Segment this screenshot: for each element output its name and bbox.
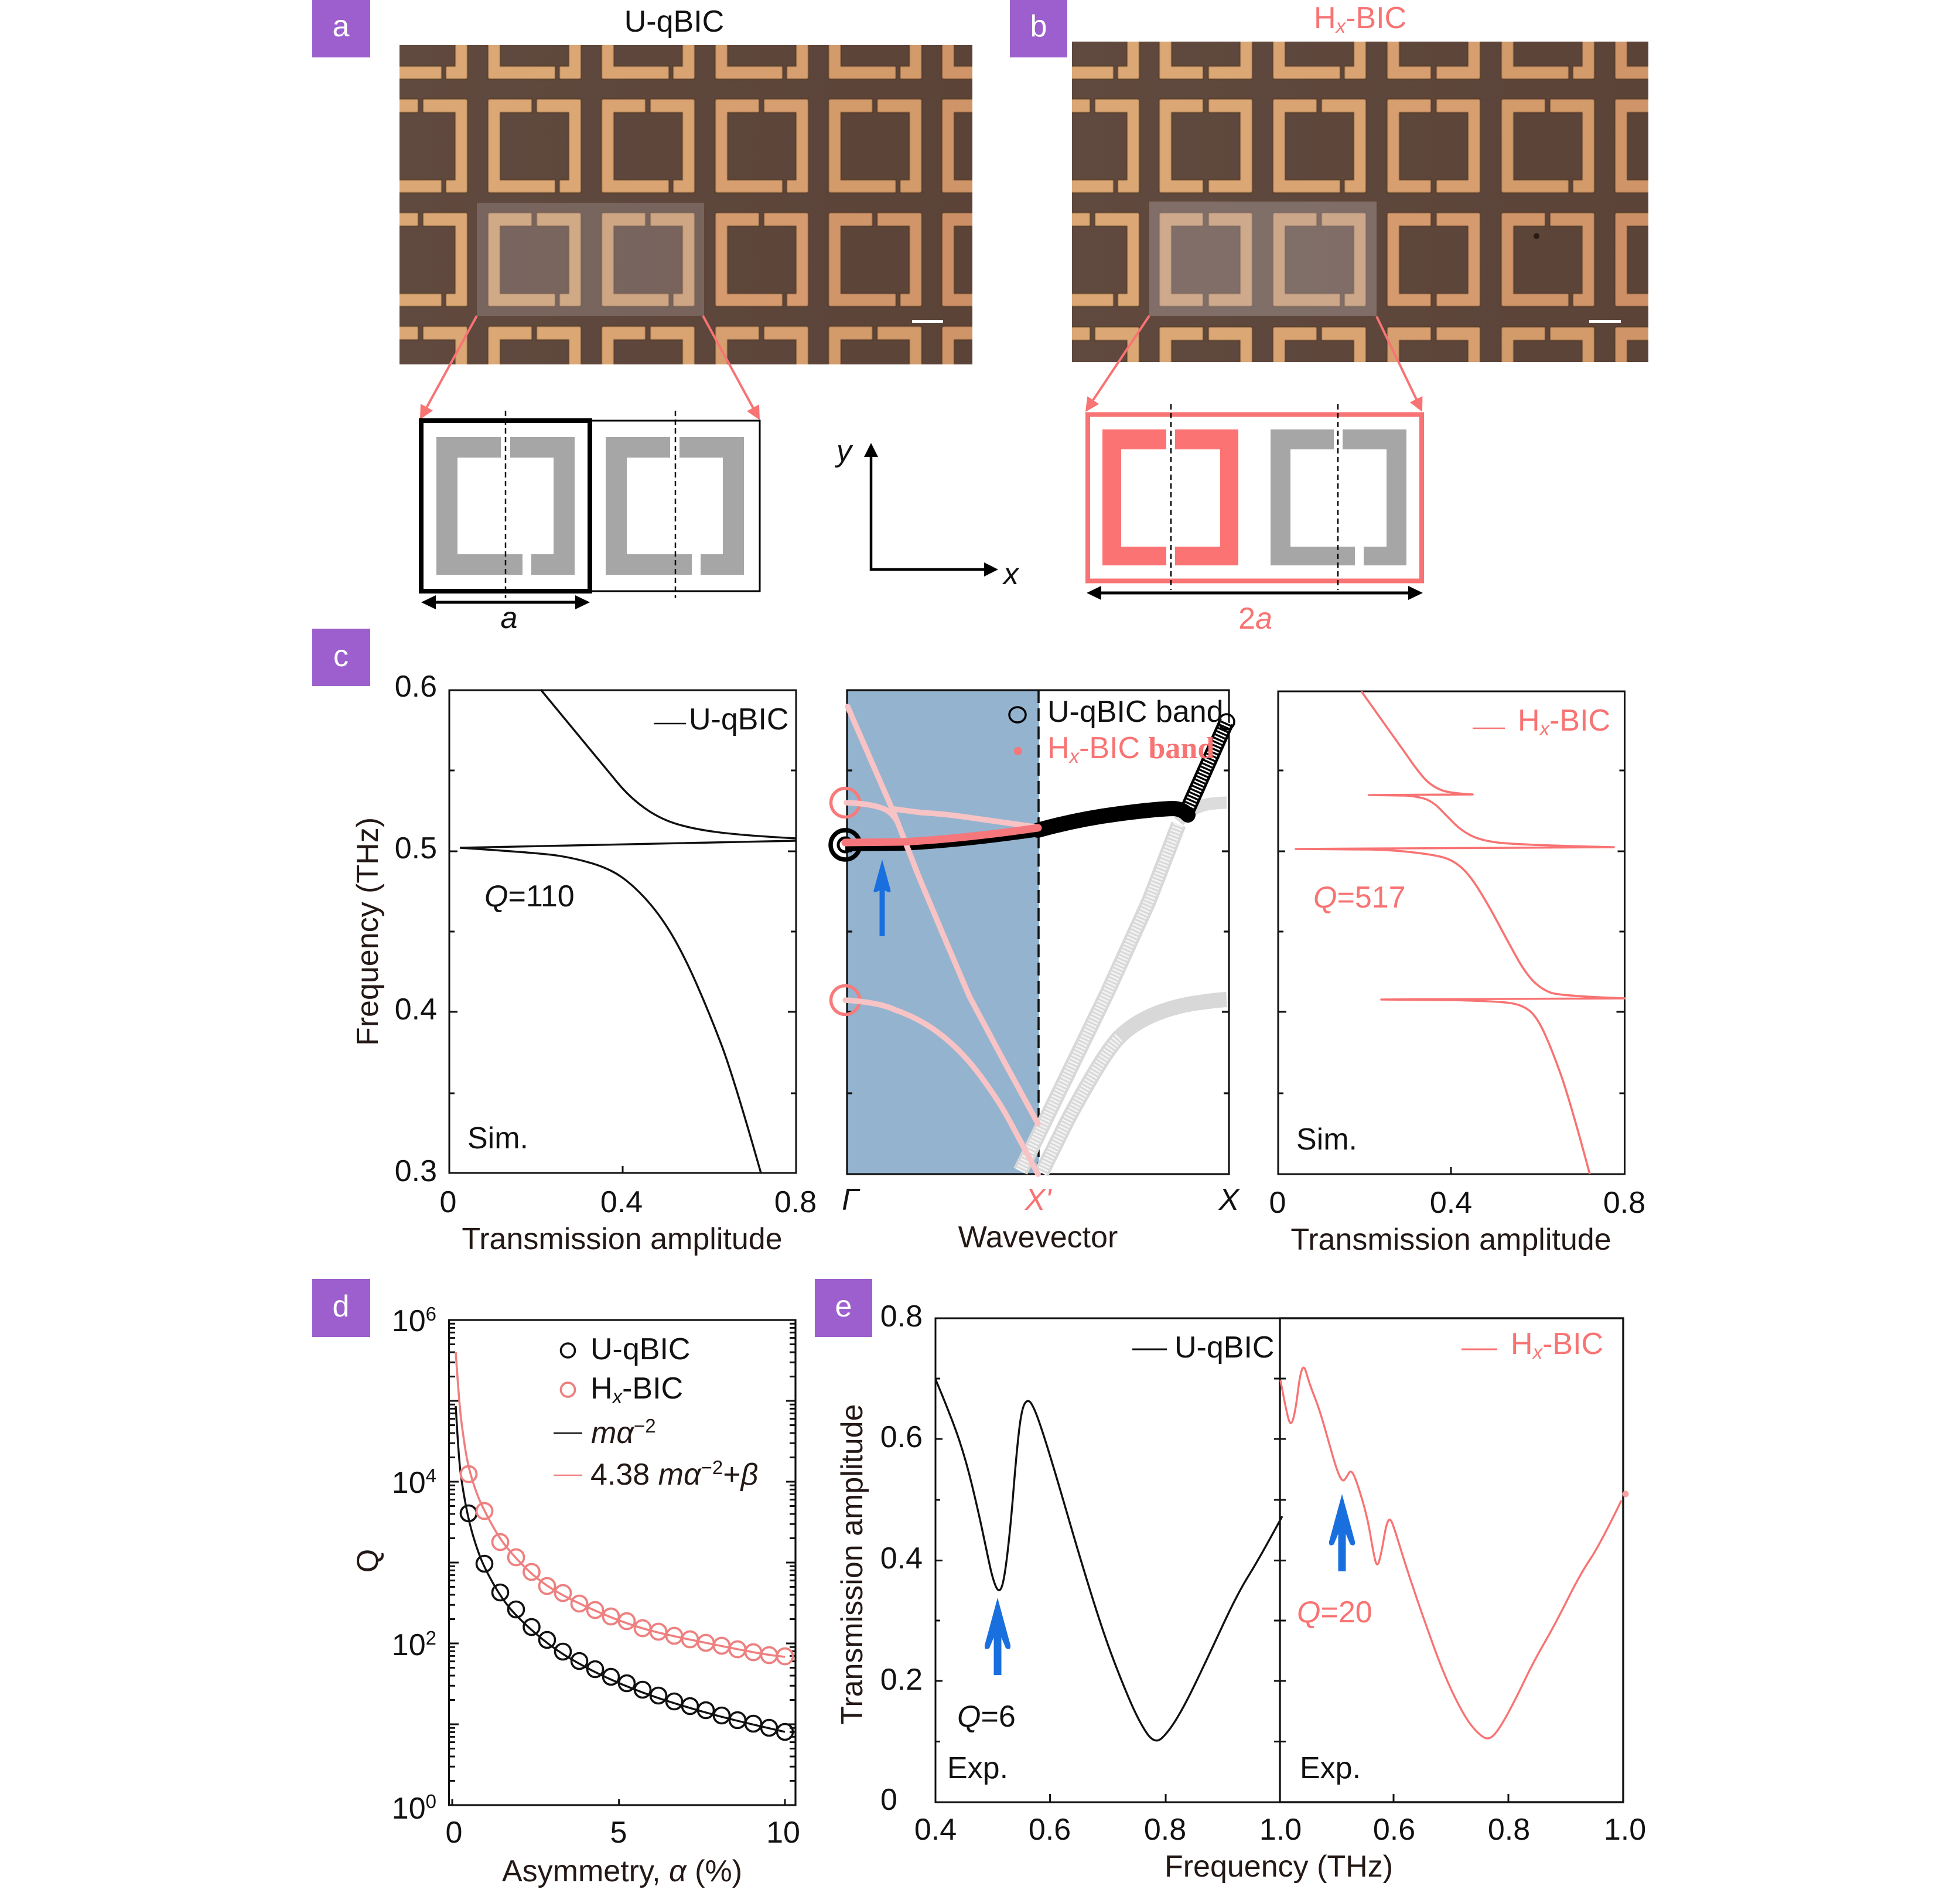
plot frame and ticks [449,690,796,1173]
heading: U-qBIC: U-qBIC [624,5,724,39]
x axis labels [1269,1186,1645,1220]
y axis labels: 6 [426,1303,436,1325]
fit curve: coral [456,1352,785,1657]
panel letter e [815,1279,872,1337]
microscope photo b [1072,42,1648,362]
shaded first Brillouin zone [847,690,1039,1174]
legend [554,1332,758,1492]
legend: β [740,1458,758,1492]
data points: coral circles [460,1466,793,1664]
coordinate axes: y [835,434,853,468]
y axis title: Q [351,1549,385,1573]
panel letter a: a [333,9,350,43]
zoom arrow left b [1085,316,1149,412]
legend Hx-BIC: -BIC [1542,1327,1603,1361]
dimension arrow b: 2a [1238,602,1272,636]
legend Hx-BIC: H [1511,1327,1533,1361]
panel letter b: b [1030,9,1047,43]
x axis labels: 1.0 [1604,1813,1646,1847]
y axis labels: 0.6 [395,670,437,704]
x axis labels: 0.4 [1430,1186,1472,1220]
y axis title: Transmission amplitude [835,1404,869,1725]
panel letter c [312,629,370,686]
y axis labels [395,670,437,1188]
x axis labels: 10 [766,1816,800,1850]
y axis labels: 0.5 [395,831,437,865]
blue arrow [874,859,890,936]
pink reference circles [831,789,860,1015]
x axis title: Transmission amplitude [1290,1223,1611,1257]
legend: x [1539,718,1551,739]
y axis labels: 10 [392,1466,426,1500]
plot frame and log ticks [449,1320,795,1805]
panel a: U-qBIC sample and unit cell [312,0,1035,635]
Q value: Q=110 [484,879,575,913]
dashed boundary [1037,690,1040,1174]
wavevector labels: X [1218,1183,1241,1217]
zoom arrow left a [420,316,477,419]
x axis labels: 0 [440,1185,456,1219]
Exp label left: Exp. [947,1751,1008,1785]
wavevector labels: X' [1025,1183,1052,1217]
Q value U-qBIC: Q=6 [957,1700,1016,1734]
blue arrow right [1329,1494,1355,1571]
microscope photo a [399,45,972,364]
gray bands [1020,803,1227,1173]
legend: H [590,1372,613,1406]
unit cell schematic a [421,411,760,598]
y axis labels: 0.4 [880,1541,923,1575]
x axis labels: 0 [1269,1186,1286,1220]
x axis labels: 0.8 [774,1185,817,1219]
x axis labels [440,1185,817,1219]
wavevector labels [842,1183,1241,1217]
Q value: Q=517 [1313,881,1406,915]
y axis labels: 0.6 [880,1420,923,1454]
legend: U-qBIC band [1047,695,1224,729]
legend: 4.38 mα [590,1458,701,1492]
y axis labels: 0 [426,1790,436,1812]
x axis title: Wavevector [958,1220,1118,1254]
data points: black circles [460,1506,793,1740]
heading: Hx-BIC: H [1314,1,1336,35]
chart: experimental transmission [835,1299,1646,1884]
transmission curve [1296,691,1625,1174]
chart: Q versus asymmetry [351,1303,800,1888]
y axis labels: 0.3 [395,1154,437,1188]
x axis labels: 0 [446,1816,462,1850]
y axis labels: 10 [392,1792,426,1826]
chart: band diagram [831,690,1241,1254]
x axis labels: 0.4 [914,1813,957,1847]
y axis labels: 10 [392,1628,426,1662]
U-qBIC experimental curve [935,1379,1282,1741]
heading: Hx-BIC: -BIC [1346,1,1406,35]
Sim label: Sim. [467,1121,528,1155]
legend: -BIC [1079,731,1149,765]
coordinate axes [835,434,1020,591]
Hx-BIC folded bands [845,707,1038,1174]
legend: −2 [701,1457,723,1478]
y axis title: Frequency (THz) [351,817,385,1046]
panel letter b [1010,0,1067,57]
legend Hx-BIC [1462,1327,1603,1363]
coordinate axes: x [1002,557,1020,591]
panel b: Hx-BIC sample and unit cell [1010,0,1708,636]
panel letter a [312,0,370,57]
y axis labels [880,1299,923,1817]
chart: U-qBIC simulated transmission [351,670,817,1256]
legend: + [723,1458,741,1492]
legend: band [1149,732,1214,765]
Hx-BIC band highlight [845,828,1038,843]
x axis labels: 0.8 [1144,1813,1186,1847]
y axis labels: 0.8 [880,1299,923,1333]
x axis title: Frequency (THz) [1165,1850,1393,1884]
chart: Hx-BIC simulated transmission [1269,691,1645,1257]
x axis labels: 0.6 [1029,1813,1071,1847]
U-qBIC band [831,714,1234,859]
y axis labels: 0 [880,1783,897,1817]
y axis labels: 0.2 [880,1663,923,1697]
legend Hx-BIC: x [1532,1341,1544,1363]
legend: -BIC [622,1372,683,1406]
x axis title: Transmission amplitude [462,1222,783,1256]
transmission curve [460,690,796,1173]
Sim label: Sim. [1296,1123,1357,1157]
legend: -BIC [1549,704,1610,738]
blue arrow left [985,1598,1010,1675]
panel letter e: e [835,1290,852,1324]
x axis title: Asymmetry, α (%) [502,1854,742,1888]
dimension arrow a: a [501,601,517,635]
Hx-BIC experimental curve [1281,1367,1621,1738]
fit curve: black [456,1406,785,1732]
x axis labels: 0.4 [600,1185,643,1219]
y axis labels [392,1303,436,1826]
panel letter c: c [333,639,349,673]
legend [1473,704,1610,739]
legend: x [612,1386,623,1407]
x axis labels: 5 [610,1816,627,1850]
legend U-qBIC: U-qBIC [1174,1331,1274,1365]
legend: U-qBIC [689,702,788,736]
x axis labels [914,1813,1646,1847]
y axis labels: 0.4 [395,992,437,1026]
plot frame and ticks [847,690,1229,1174]
legend: x [1068,745,1080,767]
plot frame and ticks [1278,691,1625,1174]
dimension arrow b [1087,586,1423,636]
y axis labels: 10 [392,1304,426,1338]
legend: H [1047,731,1070,765]
legend [1009,695,1224,767]
end point marker [1623,1490,1628,1498]
Exp label right: Exp. [1300,1751,1361,1785]
Q value Hx-BIC: Q=20 [1297,1595,1372,1629]
plot frames and ticks [935,1318,1623,1802]
legend: U-qBIC [590,1332,690,1366]
y axis labels: 2 [426,1627,436,1649]
x axis labels: 0.8 [1603,1186,1645,1220]
x axis labels: 0.6 [1373,1813,1415,1847]
legend: H [1518,704,1540,738]
wavevector labels: Γ [842,1183,861,1217]
unit cell schematic b [1088,404,1422,590]
panel letter d [312,1279,370,1337]
legend: mα [591,1416,634,1450]
legend: −2 [634,1415,656,1437]
x axis labels: 0.8 [1488,1813,1530,1847]
zoom arrow right a [703,316,760,420]
heading: Hx-BIC: x [1335,15,1347,37]
x axis labels: 1.0 [1259,1813,1302,1847]
zoom arrow right b [1377,316,1422,412]
panel letter d: d [333,1290,349,1324]
dimension arrow a [421,595,590,635]
x axis labels [446,1816,800,1850]
y axis labels: 4 [426,1465,436,1486]
